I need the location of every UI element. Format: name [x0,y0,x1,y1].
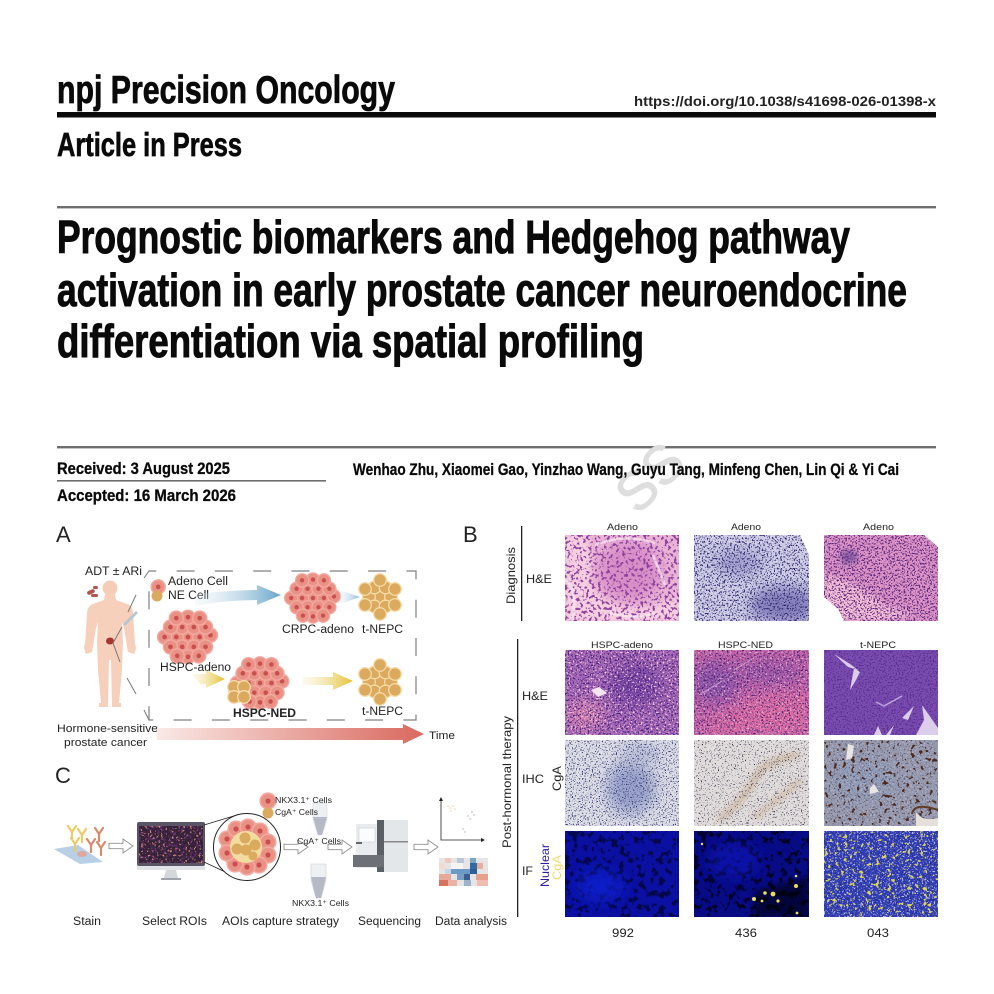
publication dates [57,460,326,505]
label hormone-sensitive: prostate cancer [64,737,147,749]
arrow 1 [109,839,133,853]
column headers post-therapy [591,640,896,651]
label: NKX3.1 cells: NKX3.1⁺ Cells [292,898,349,908]
biopsy needle and zoom lines [113,571,149,720]
sample IDs [612,926,889,940]
journal header [57,69,936,163]
image: IF 992 [565,831,679,917]
legend: Adeno Cell [168,576,228,588]
column headers post-therapy: t-NEPC [860,640,896,651]
panel letter C: C [55,763,71,788]
cluster: CRPC-adeno [284,572,341,624]
panel A: disease progression [56,522,455,749]
column headers diagnosis: Adeno [731,522,761,533]
sample IDs: 992 [612,926,634,940]
arrow 2 [284,840,308,854]
tube liquid: NKX3.1 [311,877,326,898]
AOI circle [214,814,280,880]
column headers diagnosis: Adeno [863,522,894,533]
tube liquid: CgA [313,817,327,835]
image: IF 436 [694,831,809,917]
panel C: workflow [54,763,507,928]
label hormone-sensitive: Hormone-sensitive [57,723,158,735]
step labels: Data analysis [435,916,507,928]
image: t-NEPC H&E [824,650,938,735]
panel letter B: B [463,522,478,547]
DOI: https://doi.org/10.1038/s41698-026-01398-x [634,93,936,109]
column headers post-therapy: HSPC-NED [718,640,773,651]
watermark: -ss [565,420,700,555]
image: HSPC-adeno H&E [565,650,679,735]
step labels [73,916,507,928]
label hormone-sensitive [57,723,158,749]
scatter plot [439,797,485,842]
stain label diagnosis H&E: H&E [526,572,552,586]
label t-NEPC bottom: t-NEPC [362,706,403,718]
label HSPC-NED: HSPC-NED [233,708,296,720]
tube: NKX3.1 [311,864,326,898]
image: HSPC-NED H&E [694,650,809,735]
step labels: Select ROIs [142,916,207,928]
legend: capture [259,792,332,818]
row label: Diagnosis: Diagnosis [504,547,518,604]
sample IDs: 043 [867,926,889,940]
accepted date: Accepted: 16 March 2026 [57,487,236,505]
panel letter A: A [56,522,71,547]
arrow: CRPC to t-NEPC [340,590,360,604]
heatmap [439,858,488,886]
image: diagnosis adeno 3 [824,535,938,621]
label HSPC-adeno: HSPC-adeno [160,662,231,674]
legend [150,576,228,602]
legend: capture: CgA⁺ Cells [275,807,318,817]
article status: Article in Press [57,126,242,163]
arrow: NED to t-NEPC [303,672,353,690]
article title [57,211,907,367]
label: CgA cells: CgA⁺ Cells [297,836,341,846]
article title: differentiation via spatial profiling [57,315,644,367]
step labels: Sequencing [358,916,421,928]
cluster: HSPC-adeno [157,609,218,665]
label CgA yellow: CgA [550,855,564,880]
label t-NEPC top: t-NEPC [362,624,403,636]
zoom lines to circle [204,815,237,877]
cluster: t-NEPC top [359,574,401,620]
icon: pills [87,586,98,597]
header rule [57,112,936,118]
image: IHC CgA 436 [694,740,809,826]
icon: stained slide [54,826,105,864]
image: diagnosis adeno 2 [694,535,809,621]
icon: monitor [137,822,205,880]
column headers post-therapy: HSPC-adeno [591,640,653,651]
legend: capture: NKX3.1⁺ Cells [275,795,332,805]
step labels: Stain [73,916,101,928]
cluster: t-NEPC bottom [359,659,401,705]
label Nuclear: Nuclear [538,844,552,887]
dashed frame [149,571,416,720]
image: diagnosis adeno 1 [565,535,679,621]
column headers diagnosis [607,522,894,533]
time arrow [157,724,424,744]
icon: sequencer [353,820,408,872]
journal name: npj Precision Oncology [57,69,395,112]
step labels: AOIs capture strategy [222,916,339,928]
icon: human body [84,580,136,707]
arrow: adeno to NED [192,670,225,688]
row label: Post-hormonal therapy: Post-hormonal therapy [500,716,514,848]
label CRPC-adeno: CRPC-adeno [282,624,354,636]
stain label IF: IF [522,864,533,878]
stain label IHC: IHC [522,772,544,786]
cluster: HSPC-NED [228,656,290,710]
image: IHC CgA 992 [565,740,679,826]
arrow: adeno to CRPC [195,585,281,606]
tube: CgA [313,803,327,835]
treatment label: ADT ± ARi [85,566,142,578]
received date: Received: 3 August 2025 [57,460,230,478]
arrow 3 [328,840,352,854]
stain label CgA: CgA [550,766,564,791]
stain label H&E: H&E [522,689,548,703]
sample IDs: 436 [735,926,757,940]
column headers diagnosis: Adeno [607,522,638,533]
image: IHC CgA 043 [824,740,938,826]
arrow 4 [414,840,438,854]
panel B: histology grid [463,522,938,940]
image: IF 043 [824,831,938,917]
legend: NE Cell [168,590,209,602]
time label: Time [429,730,455,742]
